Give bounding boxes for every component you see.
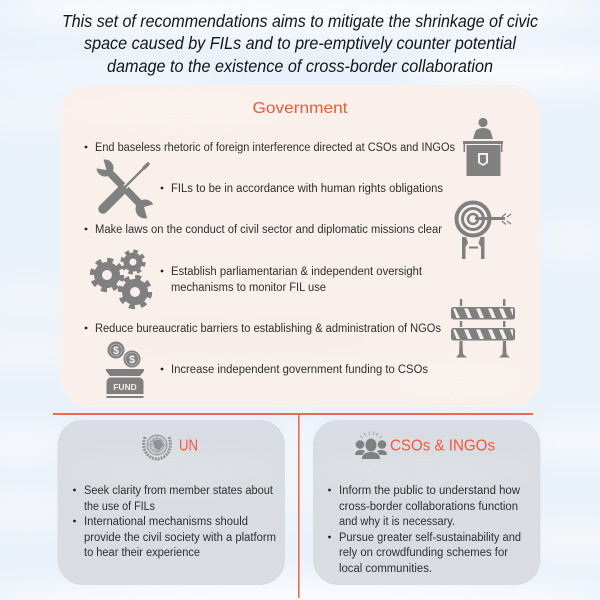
panel: government [60,85,540,407]
divider: vertical rule [298,414,300,598]
item: parliamentarian oversight [161,266,423,294]
item: parliamentarian oversight: mechanisms to monitor FIL use [171,282,326,294]
icon: wrench and screwdriver [94,158,158,221]
list: UN recommendations: to hear their experience [84,547,200,559]
list: CSO recommendations: rely on crowdfunding schemes for [339,547,508,559]
list: CSO recommendations: Pursue greater self-sustainability and [339,532,521,544]
icon: group of people [355,432,387,459]
heading: UN: UN [179,438,198,454]
title: This set of recommendations aims to mitigate the shrinkage of civic [62,11,538,31]
icon: fund scale with coins: FUND [113,382,137,392]
panel: CSOs and INGOs [313,420,540,585]
divider: horizontal rule [53,413,533,415]
item: increase funding: Increase independent government funding to CSOs [171,364,428,376]
list: CSO recommendations: local communities. [339,563,432,575]
list: CSO recommendations [328,485,521,575]
panel: UN [58,420,285,585]
heading: CSOs and INGOs: CSOs & INGOs [390,438,495,454]
item: parliamentarian oversight: Establish parliamentarian & independent oversight [171,266,423,278]
list: UN recommendations: Seek clarity from member states about [84,485,274,497]
icon: UN emblem [144,435,170,459]
heading: government: Government [252,100,348,117]
list: UN recommendations: provide the civil society with a platform [84,532,276,544]
icon: target with arrow [456,202,511,259]
icon: podium speaker [463,118,503,176]
list: UN recommendations: International mechanisms should [84,516,248,528]
title: space caused by FILs and to pre-emptively counter potential [84,33,517,53]
list: UN recommendations: the use of FILs [84,501,155,513]
item: end baseless rhetoric: End baseless rhetoric of foreign interference directed at CSOs and INGOs [95,142,455,154]
item: reduce barriers: Reduce bureaucratic barriers to establishing & administration of NGOs [95,323,441,335]
item: make laws clear: Make laws on the conduct of civil sector and diplomatic missions clear [95,224,442,236]
title [62,11,538,76]
icon: fund scale with coins: $ [129,354,135,366]
title: damage to the existence of cross-border collaboration [107,56,493,76]
list: CSO recommendations: and why it is necessary. [339,516,455,528]
icon: road barrier [451,299,515,358]
icon: fund scale with coins: $ [113,345,119,357]
list: CSO recommendations: cross-border collaborations function [339,501,518,513]
list: CSO recommendations: Inform the public to understand how [339,485,521,497]
icon: fund scale with coins [106,342,144,398]
list: UN recommendations [73,485,276,559]
icon: gears [92,251,150,307]
item: FILs human rights: FILs to be in accordance with human rights obligations [171,183,443,195]
